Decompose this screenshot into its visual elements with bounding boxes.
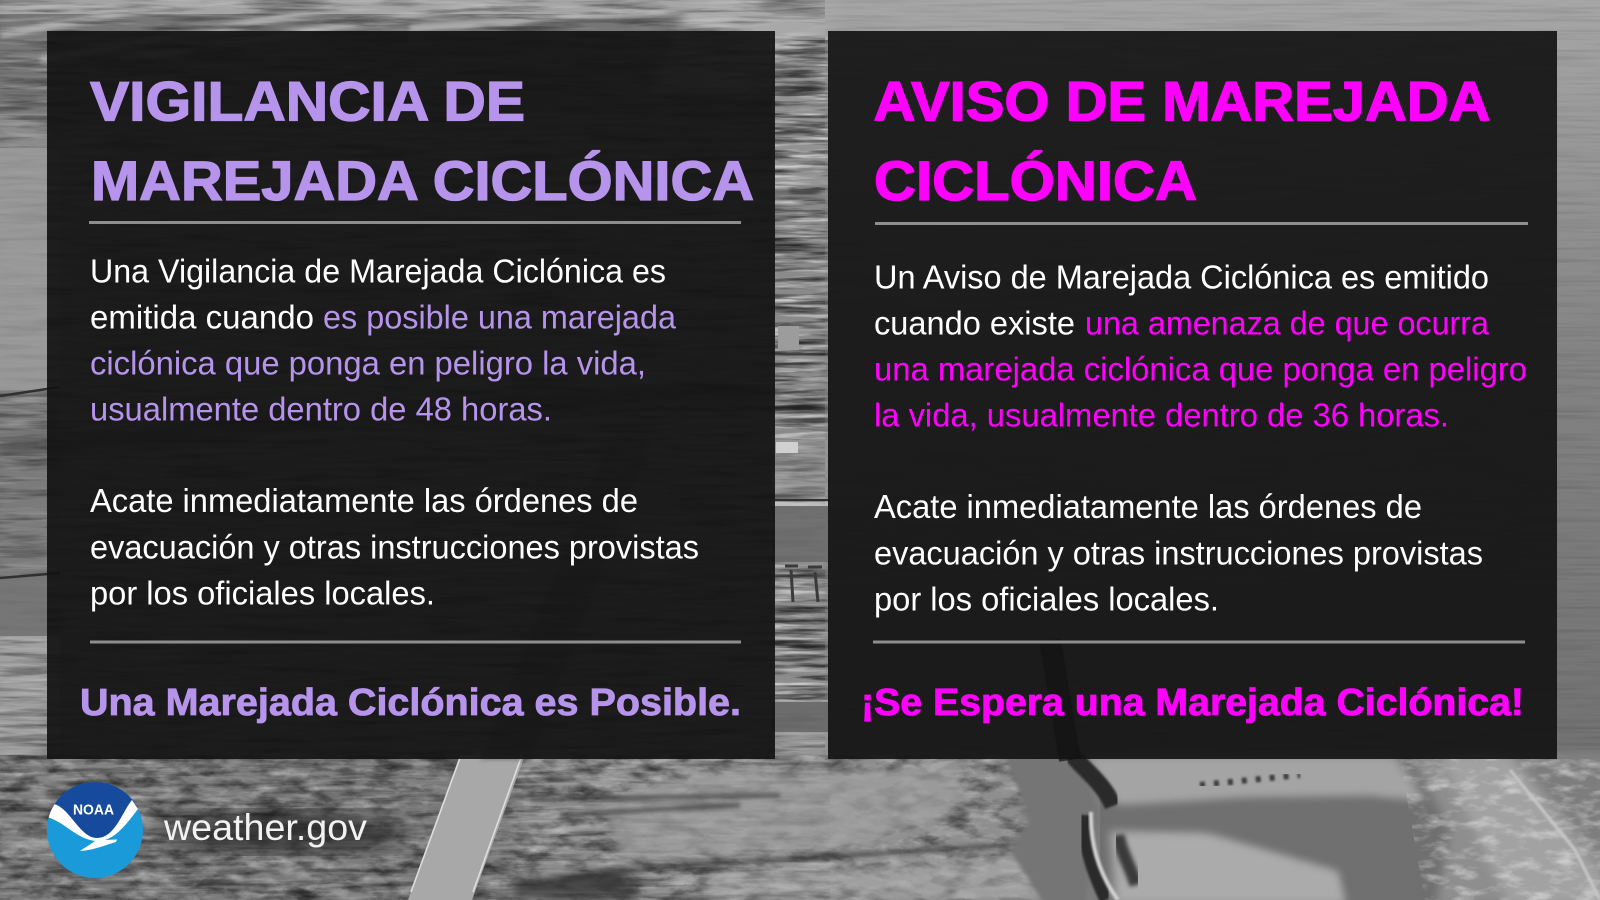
heading: Vigilancia de Marejada Ciclónica: VIGILANCIA DE: [90, 70, 525, 132]
text block: definition: es posible una marejada: [323, 300, 676, 336]
text block: instructions: evacuación y otras instrucciones provistas: [874, 536, 1483, 572]
text block: instructions: [90, 483, 699, 612]
callout: Una Marejada Ciclónica es Posible: Una Marejada Ciclónica es Posible.: [80, 682, 741, 724]
text block: definition: una marejada ciclónica que ponga en peligro: [874, 352, 1527, 388]
heading: Aviso de Marejada Ciclónica: AVISO DE MAREJADA: [874, 70, 1490, 132]
text block: definition: la vida, usualmente dentro de 36 horas.: [874, 398, 1449, 434]
text block: definition: [874, 260, 1527, 434]
text block: definition: emitida cuando: [90, 300, 314, 336]
road inside picture: [408, 755, 525, 900]
icon: NOAA seal: NOAA: [73, 802, 114, 818]
callout: Se Espera una Marejada Ciclónica: ¡Se Espera una Marejada Ciclónica!: [861, 682, 1524, 724]
panel: Aviso (warning): [828, 31, 1557, 759]
heading: Vigilancia de Marejada Ciclónica: [90, 70, 754, 212]
dark haze behind web address: [160, 812, 410, 852]
water channels and jetties: [1005, 755, 1098, 900]
text block: instructions: [874, 489, 1483, 618]
heading: Aviso de Marejada Ciclónica: [874, 70, 1490, 212]
icon: NOAA seal: [47, 782, 143, 878]
text block: instructions: Acate inmediatamente las órdenes de: [90, 483, 638, 520]
web address: weather.gov: [163, 807, 368, 848]
text block: definition: una amenaza de que ocurra: [1085, 306, 1489, 342]
text block: definition: Una Vigilancia de Marejada Ciclónica es: [90, 254, 666, 290]
text block: definition: Un Aviso de Marejada Ciclónica es emitido: [874, 260, 1489, 296]
text block: definition: ciclónica que ponga en peligro la vida,: [90, 346, 646, 382]
debris and sand: [600, 770, 960, 860]
text block: instructions: por los oficiales locales.: [90, 576, 435, 612]
text block: definition: [90, 254, 676, 428]
panel: Vigilancia (watch): [47, 31, 775, 759]
text block: instructions: evacuación y otras instrucciones provistas: [90, 530, 699, 566]
text block: instructions: por los oficiales locales.: [874, 582, 1219, 618]
text block: definition: cuando existe: [874, 306, 1075, 342]
text block: instructions: Acate inmediatamente las órdenes de: [874, 489, 1422, 526]
text block: definition: usualmente dentro de 48 horas.: [90, 392, 552, 428]
heading: Aviso de Marejada Ciclónica: CICLÓNICA: [874, 149, 1197, 212]
heading: Vigilancia de Marejada Ciclónica: MAREJADA CICLÓNICA: [91, 149, 754, 212]
